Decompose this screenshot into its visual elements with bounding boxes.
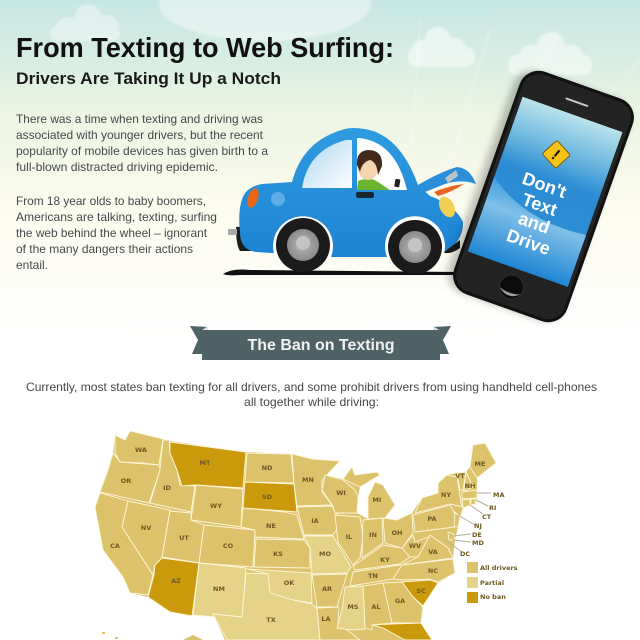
state labels: OR — [121, 477, 131, 485]
state labels — [110, 446, 485, 624]
state labels: GA — [395, 597, 405, 605]
western states — [115, 431, 163, 465]
text block: intro paragraph — [16, 112, 268, 174]
text block: intro paragraph: associated with younger drivers, but the recent — [16, 128, 264, 142]
US map — [95, 431, 504, 640]
phone body — [448, 65, 639, 328]
state labels: MN — [302, 476, 314, 484]
state labels: OH — [392, 529, 402, 537]
map legend: All drivers — [480, 564, 518, 572]
state labels: WI — [336, 489, 346, 497]
phone message: and — [516, 208, 553, 238]
illustration: smartphone — [442, 63, 639, 328]
state labels: AR — [322, 585, 332, 593]
state labels: CO — [223, 542, 234, 550]
state labels: VT — [455, 472, 465, 480]
text block: intro paragraph: There was a time when texting and driving was — [16, 112, 263, 126]
northeast callouts: DC — [460, 550, 470, 558]
section banner — [190, 326, 451, 360]
home button — [496, 272, 527, 302]
text block: ban description: all together while driving: — [244, 395, 379, 409]
northeast states — [413, 505, 458, 532]
phone shadow — [442, 65, 635, 326]
northeast callouts: NJ — [474, 522, 482, 530]
tail light — [245, 187, 261, 209]
state labels: IN — [369, 531, 377, 539]
northeast callouts: DE — [472, 531, 482, 539]
state labels: MS — [347, 603, 359, 611]
warning icon: ! — [548, 147, 563, 164]
state labels: NY — [441, 491, 451, 499]
northeast callouts: MA — [493, 491, 504, 499]
country silhouette — [95, 431, 496, 640]
state labels: CA — [110, 542, 120, 550]
illustration: blue car — [223, 128, 476, 275]
rear bumper — [236, 226, 256, 251]
state labels: ND — [262, 464, 273, 472]
text block: ban description — [26, 380, 597, 409]
state labels: AZ — [171, 577, 181, 585]
text block: second paragraph: entail. — [16, 258, 48, 272]
state labels: ME — [475, 460, 485, 468]
wheels — [276, 218, 330, 272]
state labels: OK — [284, 579, 295, 587]
text block: intro paragraph: full-blown distracted driving epidemic. — [16, 160, 218, 174]
state labels: IA — [311, 517, 319, 525]
rear window — [302, 140, 352, 188]
background sky — [0, 0, 640, 340]
text block: intro paragraph: popularity of mobile devices has given birth to a — [16, 144, 268, 158]
car body — [239, 128, 463, 257]
phone message: Drive — [504, 225, 553, 259]
warning icon — [542, 140, 570, 169]
state labels: WY — [210, 502, 222, 510]
road shadow — [223, 270, 460, 275]
front bumper — [444, 240, 460, 253]
southern states — [350, 565, 402, 586]
central states — [245, 453, 294, 483]
state labels: NE — [266, 522, 276, 530]
text block: second paragraph: of the many dangers their actions — [16, 242, 193, 256]
state labels: AL — [371, 603, 381, 611]
phone message — [500, 168, 573, 259]
state labels: SC — [416, 587, 426, 595]
subtitle: Drivers Are Taking It Up a Notch — [16, 69, 281, 88]
state labels: TX — [266, 616, 276, 624]
state labels: IL — [346, 533, 352, 541]
northeast callouts: RI — [489, 504, 496, 512]
northeast callouts: MD — [472, 539, 484, 547]
state labels: KY — [380, 556, 390, 564]
title: From Texting to Web Surfing: — [16, 32, 394, 63]
state labels: LA — [321, 615, 331, 623]
state labels: MO — [319, 550, 331, 558]
state labels: NM — [213, 585, 225, 593]
state labels: KS — [273, 550, 283, 558]
wheel arches — [273, 216, 333, 257]
phone message: Text — [519, 189, 560, 220]
state labels: MI — [373, 496, 381, 504]
text block: second paragraph: From 18 year olds to baby boomers, — [16, 194, 206, 208]
state labels: NC — [428, 567, 438, 575]
northeast callouts — [445, 491, 504, 558]
clouds — [50, 0, 592, 75]
state labels: PA — [427, 515, 437, 523]
text block: second paragraph: Americans are talking, texting, surfing — [16, 210, 217, 224]
state labels: NV — [141, 524, 151, 532]
text block: second paragraph — [16, 194, 217, 272]
headlight — [436, 194, 458, 220]
state labels: SD — [262, 493, 273, 501]
state labels: ID — [163, 484, 172, 492]
great lakes states — [322, 475, 358, 513]
door handle — [356, 192, 374, 198]
state labels: TN — [368, 572, 378, 580]
state labels: UT — [179, 534, 189, 542]
northeast callouts: CT — [482, 513, 492, 521]
state labels: WA — [135, 446, 147, 454]
alaska and hawaii fragments — [102, 632, 203, 640]
driver window — [357, 138, 407, 190]
text block: ban description: Currently, most states ban texting for all drivers, and some prohibit drivers from using handheld cell-phones — [26, 380, 597, 394]
phone message: Don't — [520, 168, 569, 202]
state labels: VA — [428, 548, 438, 556]
open hood — [418, 167, 476, 192]
map legend: Partial — [480, 579, 504, 587]
screen — [468, 97, 623, 287]
map legend: No ban — [480, 593, 506, 601]
state labels: MT — [200, 459, 211, 467]
text block: second paragraph: the web behind the wheel – ignorant — [16, 226, 208, 240]
state labels: NH — [465, 482, 475, 490]
section banner: The Ban on Texting — [248, 337, 394, 354]
map legend — [467, 562, 518, 603]
speaker — [565, 97, 589, 107]
driver — [357, 150, 400, 190]
state labels: WV — [409, 542, 421, 550]
